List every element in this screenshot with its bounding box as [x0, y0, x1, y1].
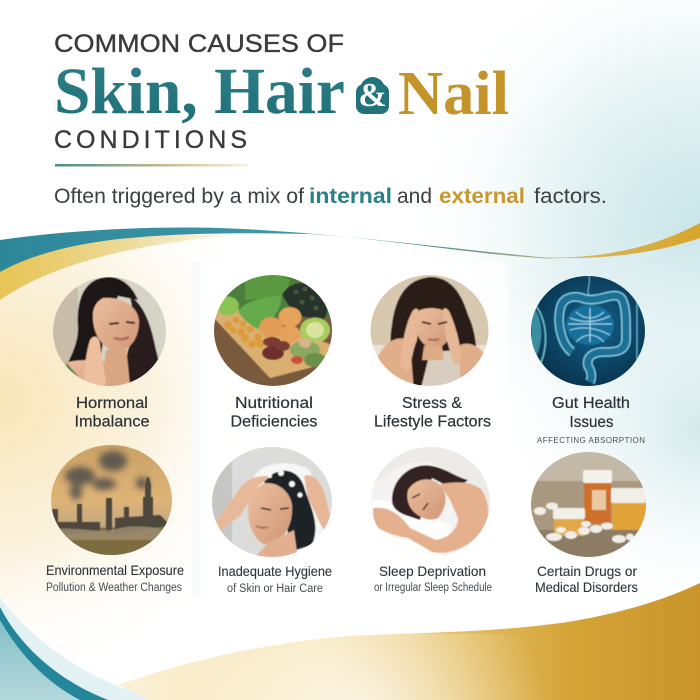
label: Hormonal: [76, 395, 148, 412]
title word: nail: Nail: [398, 60, 509, 128]
title line: common causes of: COMMON CAUSES OF: [54, 30, 344, 58]
photo: stressed woman holding head: [370, 275, 488, 386]
ampersand badge: &: [358, 77, 387, 114]
photo: woman washing hair: [212, 447, 332, 557]
label line 2: Imbalance: [74, 414, 150, 430]
title: [54, 30, 509, 166]
sublabel: AFFECTING ABSORPTION: [537, 436, 645, 445]
label line 2: Issues: [570, 414, 614, 431]
panel: nutritional deficiencies: [214, 275, 332, 427]
panel: hormonal imbalance: [50, 275, 170, 430]
photo: woman sleeping: [371, 447, 490, 556]
decorative bottom waves: [0, 583, 700, 700]
sublabel: Pollution & Weather Changes: [46, 582, 182, 594]
photo: pill bottles and tablets: [531, 452, 646, 557]
photo: healthy food on board: [214, 275, 332, 386]
photo: woman touching face: [53, 277, 166, 386]
sublabel: of Skin or Hair Care: [227, 583, 323, 595]
illustration: glowing intestines: [531, 276, 645, 386]
label: Inadequate Hygiene: [218, 563, 332, 579]
title underline: [55, 164, 248, 166]
label: Nutritional: [235, 395, 313, 412]
subtitle: Often triggered by a mix of: [54, 185, 304, 208]
label line 2: Medical Disorders: [535, 579, 638, 595]
sublabel: or Irregular Sleep Schedule: [374, 582, 492, 594]
subtitle: and: [397, 185, 432, 208]
panel: sleep deprivation: [368, 444, 495, 594]
subtitle: internal: [309, 185, 392, 208]
subtitle: external: [439, 185, 525, 208]
label: Gut Health: [552, 395, 630, 412]
subtitle: factors.: [534, 185, 607, 208]
label: Certain Drugs or: [537, 563, 637, 579]
label: Environmental Exposure: [46, 562, 184, 578]
title line: skin, hair: Skin, Hair: [54, 55, 345, 128]
decorative top wave: [0, 223, 700, 300]
panel: gut health issues: [526, 273, 648, 445]
label: Stress &: [402, 395, 463, 412]
panel: inadequate hygiene: [208, 444, 336, 595]
subtitle: [54, 185, 607, 208]
panel: environmental exposure: [45, 442, 184, 594]
label line 2: Lifestyle Factors: [374, 414, 491, 430]
panel: stress and lifestyle factors: [366, 272, 494, 430]
label: Sleep Deprivation: [379, 563, 486, 579]
photo: factory smoke pollution: [51, 445, 172, 555]
label line 2: Deficiencies: [230, 414, 318, 430]
title line: conditions: CONDITIONS: [54, 126, 247, 154]
panel: certain drugs or medical disorders: [528, 449, 650, 595]
